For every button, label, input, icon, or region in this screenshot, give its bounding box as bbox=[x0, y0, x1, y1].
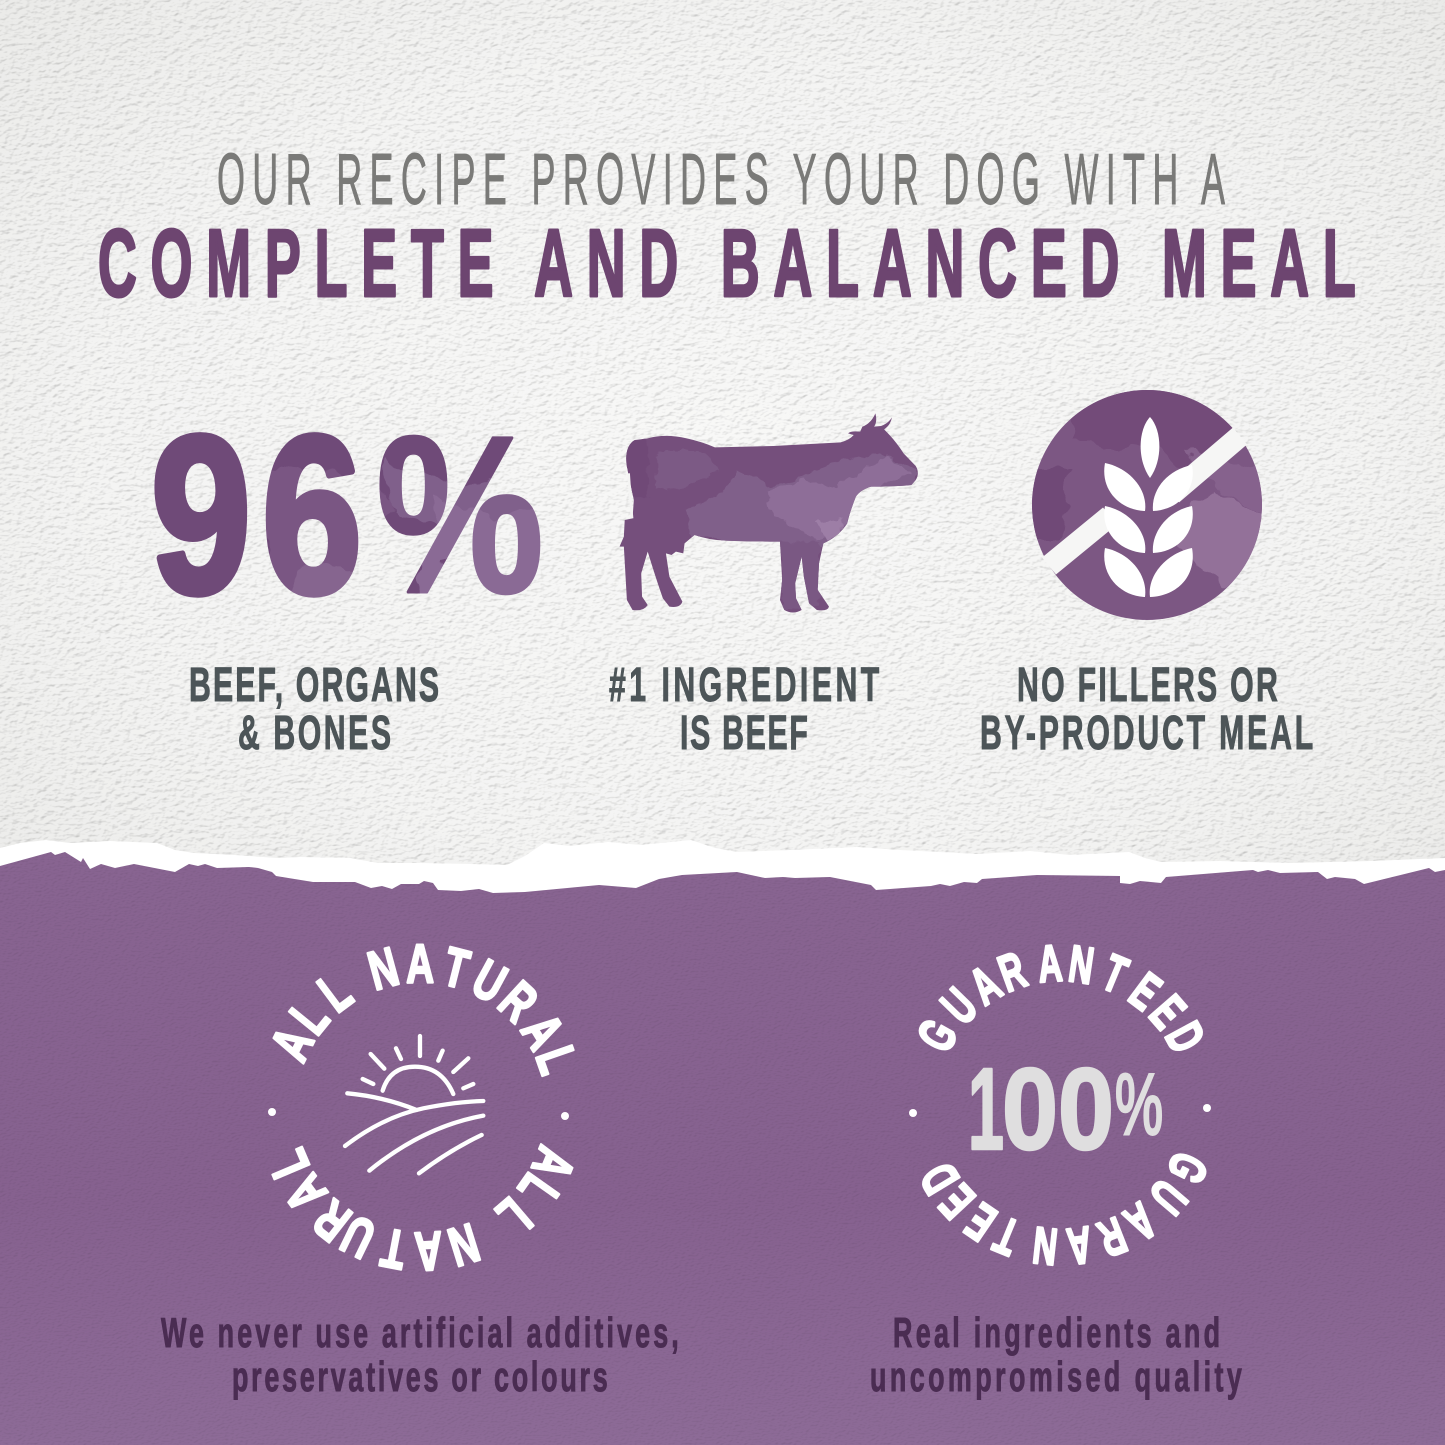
label: number one ingredient: #1 INGREDIENT bbox=[609, 659, 880, 712]
ring text top: R bbox=[487, 970, 549, 1034]
ring text top: L bbox=[523, 1039, 589, 1081]
badge: all natural bbox=[257, 934, 589, 1282]
ring text bottom: E bbox=[955, 1191, 1007, 1252]
number 100 bbox=[968, 1044, 1114, 1174]
heading line 1: OUR RECIPE PROVIDES YOUR DOG WITH A bbox=[217, 139, 1225, 220]
ring text bottom: A bbox=[413, 1219, 444, 1282]
ring text top bbox=[259, 934, 589, 1081]
label: no fillers: NO FILLERS OR bbox=[1017, 659, 1278, 712]
text: real ingredients: Real ingredients and bbox=[893, 1310, 1220, 1357]
paper background bbox=[0, 0, 1445, 920]
icon: wheat leaves bbox=[1104, 417, 1193, 597]
ring text bottom: E bbox=[928, 1173, 986, 1229]
text: never artificial: preservatives or colours bbox=[232, 1354, 608, 1401]
ring text top: A bbox=[960, 954, 1011, 1017]
ring text bottom: T bbox=[377, 1216, 411, 1280]
ring dots bbox=[909, 1104, 1211, 1117]
ring text top: T bbox=[437, 936, 475, 1002]
torn paper edge white bbox=[0, 840, 1445, 900]
icon: no grain disc bbox=[1032, 390, 1262, 620]
label: beef organs bones: BEEF, ORGANS bbox=[189, 659, 439, 712]
icon: sunrise over fields bbox=[345, 1036, 483, 1173]
ring text bottom: U bbox=[1138, 1169, 1198, 1225]
ring text bottom: L bbox=[506, 1163, 570, 1217]
ring text top: A bbox=[406, 934, 434, 995]
text: real ingredients: uncompromised quality bbox=[870, 1354, 1242, 1401]
ring text top: U bbox=[930, 977, 989, 1035]
stat: 96 percent: % bbox=[376, 390, 544, 640]
ring text bottom: R bbox=[303, 1187, 363, 1253]
label: beef organs bones: & BONES bbox=[238, 707, 391, 760]
ring text bottom: D bbox=[909, 1153, 971, 1204]
ring text top: U bbox=[462, 948, 516, 1015]
ring text top: E bbox=[1119, 962, 1171, 1022]
ring text top: L bbox=[279, 989, 341, 1046]
percent sign: % bbox=[1115, 1057, 1163, 1153]
ring text top: E bbox=[1138, 985, 1197, 1040]
stat: 96 percent bbox=[151, 390, 544, 640]
label: number one ingredient bbox=[609, 659, 880, 760]
ring text bottom: U bbox=[333, 1202, 384, 1270]
text: real ingredients bbox=[870, 1310, 1242, 1401]
ring text bottom: A bbox=[519, 1138, 586, 1188]
stat: 96 percent: 9 bbox=[151, 390, 251, 640]
ring text top: R bbox=[991, 941, 1034, 1004]
ring text top: T bbox=[1094, 944, 1136, 1005]
ring text bottom: L bbox=[257, 1141, 322, 1186]
icon: strike band bbox=[1049, 436, 1240, 566]
ring text top bbox=[906, 934, 1216, 1062]
ring text bottom: T bbox=[986, 1205, 1027, 1266]
badge: guaranteed 100 percent bbox=[906, 934, 1219, 1276]
number 100: 1 bbox=[968, 1044, 1004, 1174]
ring text top: A bbox=[509, 1004, 576, 1060]
ring text bottom: N bbox=[441, 1211, 486, 1277]
label: no fillers: BY-PRODUCT MEAL bbox=[980, 707, 1313, 760]
number 100: 00 bbox=[1002, 1044, 1114, 1174]
ring text bottom: G bbox=[1155, 1143, 1219, 1192]
text: never artificial bbox=[161, 1310, 679, 1401]
ring text bottom: L bbox=[485, 1185, 543, 1247]
ring text bottom bbox=[257, 1138, 586, 1282]
icon: cow silhouette bbox=[613, 410, 925, 617]
ring text top: A bbox=[1036, 934, 1064, 994]
ring text bottom: R bbox=[1090, 1205, 1134, 1268]
ring text top: D bbox=[1153, 1013, 1216, 1062]
ring text bottom: N bbox=[1030, 1215, 1060, 1276]
ring dots bbox=[268, 1108, 569, 1120]
label: no fillers bbox=[980, 659, 1313, 760]
label: beef organs bones bbox=[189, 659, 439, 760]
ring text bottom: A bbox=[273, 1163, 339, 1222]
ring text bottom: A bbox=[1064, 1215, 1095, 1276]
ring text top: G bbox=[906, 1010, 969, 1061]
ring text top: A bbox=[259, 1018, 327, 1070]
heading line 2: COMPLETE AND BALANCED MEAL bbox=[98, 211, 1356, 317]
text: never artificial: We never use artificial additives, bbox=[161, 1310, 679, 1357]
ring text top: N bbox=[362, 936, 405, 1003]
ring text top: N bbox=[1065, 935, 1097, 996]
label: number one ingredient: IS BEEF bbox=[680, 707, 808, 760]
purple lower panel bbox=[0, 840, 1445, 1445]
ring text bottom bbox=[909, 1143, 1219, 1276]
ring text top: L bbox=[308, 961, 363, 1025]
ring text bottom: A bbox=[1114, 1191, 1167, 1252]
stat: 96 percent: 6 bbox=[262, 390, 362, 640]
